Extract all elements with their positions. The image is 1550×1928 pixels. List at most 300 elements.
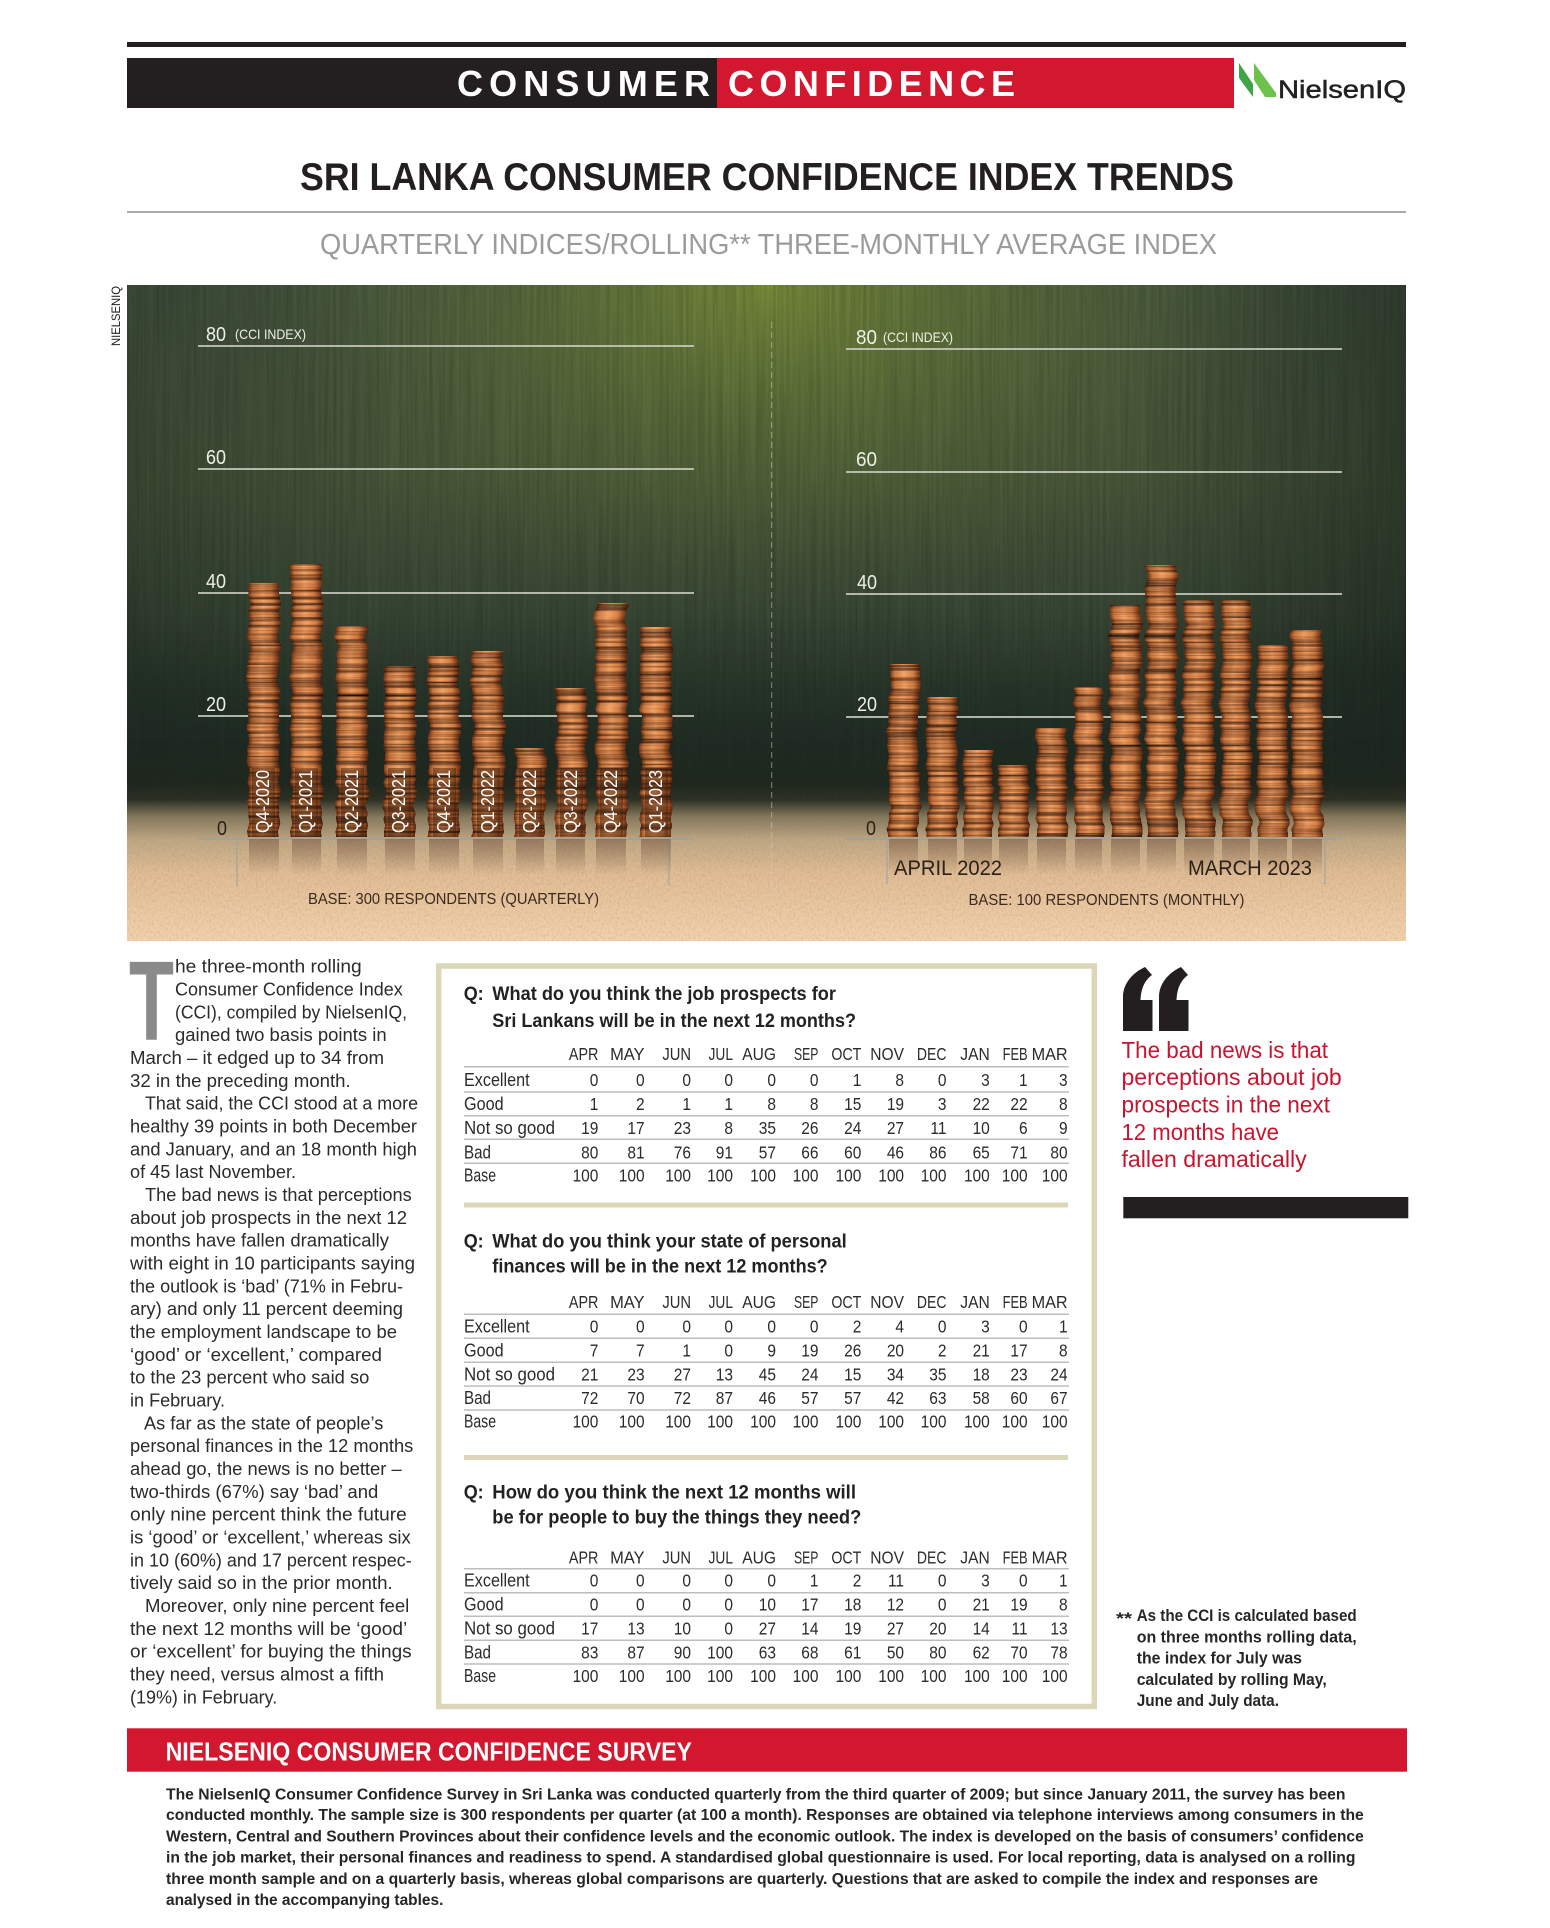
table 2: personal finances: 46 <box>759 1388 776 1408</box>
text block: article: the outlook is ‘bad’ (71% in Febru- <box>130 1275 403 1296</box>
table 2: personal finances: JUN <box>662 1292 691 1312</box>
text block: article: March – it edged up to 34 from <box>130 1047 384 1068</box>
table 3: buying things: JUN <box>662 1547 691 1568</box>
text block: article <box>129 938 418 1707</box>
table 3: buying things: FEB <box>1003 1547 1028 1568</box>
table 1: job prospects: 76 <box>674 1142 691 1163</box>
table 3: buying things: 8 <box>1059 1595 1068 1615</box>
table 3: buying things: OCT <box>831 1547 861 1568</box>
table 3: buying things: 100 <box>573 1666 598 1686</box>
table 2: personal finances: 57 <box>844 1388 861 1408</box>
table 3: buying things: 0 <box>636 1571 645 1591</box>
table 1: job prospects: 0 <box>682 1070 691 1090</box>
text block: article: gained two basis points in <box>175 1024 387 1045</box>
table 2: personal finances: 100 <box>750 1412 776 1432</box>
survey heading band <box>127 1728 1407 1772</box>
bar labels: quarters: Q2-2021 <box>342 770 362 833</box>
table 3: buying things: 0 <box>682 1595 691 1615</box>
table 1: job prospects: 100 <box>1002 1166 1028 1186</box>
table 1: job prospects: 0 <box>810 1070 818 1090</box>
chart: monthly gridlines and axis: 0 <box>866 818 876 840</box>
table 3: buying things: Not so good <box>464 1619 555 1639</box>
table 2: personal finances: 26 <box>844 1341 861 1361</box>
callout: pull quote <box>1122 1037 1342 1172</box>
callout: pull quote: prospects in the next <box>1122 1092 1331 1118</box>
text block: survey description: conducted monthly. The sample size is 300 respondents per quarter (at 100 a month). Responses are obtained via telephone interviews among consumers in the <box>166 1807 1364 1824</box>
text block: article: in February. <box>130 1390 225 1410</box>
question 2: Q: <box>464 1231 484 1253</box>
table 3: buying things: 87 <box>627 1643 645 1663</box>
bar labels: quarters: Q3-2021 <box>389 770 409 833</box>
table 1: job prospects: 100 <box>750 1166 776 1186</box>
table 3: buying things: 0 <box>1019 1571 1028 1591</box>
table 2: personal finances: 100 <box>573 1412 598 1432</box>
table 3: buying things: 19 <box>844 1619 861 1639</box>
table 2: personal finances: 9 <box>767 1341 776 1361</box>
table 2: personal finances: 34 <box>887 1364 904 1385</box>
table 3: buying things: JUL <box>709 1547 733 1568</box>
text block: article: ‘good’ or ‘excellent,’ compared <box>130 1344 382 1365</box>
table 2: personal finances: 17 <box>1010 1341 1028 1361</box>
table 2: personal finances: 18 <box>973 1364 990 1385</box>
table 2: personal finances: 87 <box>716 1388 733 1408</box>
table 2: personal finances: 58 <box>973 1388 990 1408</box>
text block: article: of 45 last November. <box>130 1161 296 1182</box>
text block: article: or ‘excellent’ for buying the things <box>130 1641 412 1662</box>
table 2: personal finances <box>464 1292 1069 1432</box>
text block: article: personal finances in the 12 months <box>130 1435 413 1456</box>
table 1: job prospects: NOV <box>870 1044 905 1064</box>
bar labels: quarters: Q1-2021 <box>296 770 316 833</box>
table 1: job prospects: 71 <box>1010 1142 1028 1163</box>
table 1: job prospects: 3 <box>1059 1070 1068 1090</box>
table 2: personal finances: 0 <box>1019 1316 1028 1337</box>
table 1: job prospects: 27 <box>887 1118 904 1138</box>
table 1: job prospects: MAR <box>1032 1044 1068 1064</box>
table 2: personal finances: Bad <box>464 1388 491 1408</box>
header rule <box>127 42 1406 47</box>
table 1: job prospects: 100 <box>964 1166 990 1186</box>
text block: survey description: analysed in the accompanying tables. <box>166 1892 443 1909</box>
table 1: job prospects: JUL <box>709 1044 733 1064</box>
bar labels: quarters: Q1-2022 <box>478 770 498 833</box>
question 1: Sri Lankans will be in the next 12 months? <box>492 1010 856 1032</box>
table 2: personal finances: 23 <box>627 1364 645 1385</box>
question 3: be for people to buy the things they need? <box>492 1506 861 1528</box>
table 1: job prospects: FEB <box>1003 1044 1028 1064</box>
text block: survey description: in the job market, their personal finances and readiness to spend. A standardised global questionnaire is used. For local reporting, data is analysed on a rolling <box>166 1850 1356 1867</box>
table 1: job prospects: 0 <box>724 1070 733 1090</box>
table 2: personal finances: 21 <box>581 1364 598 1385</box>
footnote: on three months rolling data, <box>1137 1628 1357 1646</box>
table 1: job prospects: Bad <box>464 1142 491 1162</box>
table 3: buying things: 18 <box>844 1595 861 1615</box>
callout: pull quote: perceptions about job <box>1122 1064 1342 1090</box>
table 3: buying things: 50 <box>887 1643 904 1663</box>
footnote <box>1116 1607 1357 1710</box>
table 2: personal finances: JUL <box>709 1292 733 1312</box>
table 3: buying things: 10 <box>674 1619 691 1639</box>
bar labels: quarters: Q4-2022 <box>601 770 621 833</box>
table 3: buying things: 63 <box>759 1643 776 1663</box>
table 2: personal finances: MAY <box>610 1292 645 1312</box>
table 1: job prospects: 100 <box>573 1166 598 1186</box>
table 3: buying things: 0 <box>724 1619 733 1639</box>
callout: pull quote: The bad news is that <box>1122 1037 1329 1063</box>
table 2: personal finances: 0 <box>810 1316 818 1337</box>
table 3: buying things: 100 <box>1042 1666 1068 1686</box>
text block: article: healthy 39 points in both December <box>130 1116 417 1136</box>
table 2: personal finances: 0 <box>590 1316 598 1337</box>
text block: article: That said, the CCI stood at a more <box>145 1093 418 1114</box>
table 2: personal finances: 21 <box>973 1341 990 1361</box>
table 3: buying things: 20 <box>929 1619 946 1639</box>
table 2: personal finances: 60 <box>1010 1388 1028 1408</box>
table 1: job prospects: 10 <box>973 1118 990 1138</box>
question 1: What do you think the job prospects for <box>492 983 836 1005</box>
text block: article: months have fallen dramatically <box>130 1230 390 1251</box>
bar chart: quarterly coin stacks <box>248 564 672 837</box>
text block: article: about job prospects in the next 12 <box>130 1207 407 1228</box>
table 1: job prospects: 46 <box>887 1142 904 1163</box>
table 1: job prospects: 100 <box>665 1166 691 1186</box>
table 2: personal finances: OCT <box>831 1292 861 1312</box>
table 1: job prospects: Excellent <box>464 1070 530 1090</box>
table 2: personal finances: 72 <box>674 1388 691 1408</box>
icon: quotation marks <box>1123 967 1188 1031</box>
table 2: personal finances: 100 <box>1042 1412 1068 1432</box>
table 3: buying things: JAN <box>960 1547 990 1568</box>
table 2: personal finances: 0 <box>724 1316 733 1337</box>
text block: article: (19%) in February. <box>130 1686 277 1707</box>
table 3: buying things: SEP <box>794 1547 818 1568</box>
drop cap: T <box>129 938 174 1064</box>
table 1: job prospects: 80 <box>581 1142 598 1163</box>
table 3: buying things: Bad <box>464 1643 491 1663</box>
axis labels: months <box>894 857 1312 880</box>
table 1: job prospects: 8 <box>724 1118 733 1138</box>
table 3: buying things: DEC <box>917 1547 946 1568</box>
table 3: buying things: 0 <box>938 1571 946 1591</box>
table 3: buying things: 10 <box>759 1595 776 1615</box>
text block: survey description: The NielsenIQ Consumer Confidence Survey in Sri Lanka was conducted quarterly from the third quarter of 2009; but since January 2011, the survey has been <box>166 1786 1346 1803</box>
table 3: buying things: 83 <box>581 1643 598 1663</box>
table 3: buying things: 100 <box>964 1666 990 1686</box>
question 3: Q: <box>464 1481 484 1503</box>
table 2: personal finances: 100 <box>878 1412 904 1432</box>
table 2: personal finances: 1 <box>1059 1316 1068 1337</box>
table 2: personal finances: 7 <box>636 1341 645 1361</box>
table 2: personal finances: SEP <box>794 1292 818 1312</box>
table 3: buying things: 1 <box>810 1571 818 1591</box>
table 1: job prospects: 0 <box>636 1070 645 1090</box>
table 3: buying things: 0 <box>767 1571 776 1591</box>
bar labels: quarters: Q2-2022 <box>520 770 540 833</box>
title rule <box>127 211 1406 213</box>
table 3: buying things: 0 <box>724 1571 733 1591</box>
table 1: job prospects: 1 <box>724 1094 733 1114</box>
table 1: job prospects: 19 <box>887 1094 904 1114</box>
text block: survey description: Western, Central and Southern Provinces about their confidence levels and the economic outlook. The index is developed on the basis of consumers’ confidence <box>166 1829 1364 1846</box>
table 2: personal finances: 100 <box>793 1412 818 1432</box>
panel: coin-stack charts <box>127 285 1406 941</box>
table 3: buying things: 21 <box>973 1595 990 1615</box>
table 2: personal finances: APR <box>569 1292 598 1312</box>
table 2: personal finances: 2 <box>938 1341 946 1361</box>
table 1: job prospects: 81 <box>627 1142 645 1163</box>
text block: article: Moreover, only nine percent feel <box>145 1595 409 1616</box>
table 1: job prospects: 8 <box>895 1070 904 1090</box>
text block: article: he three-month rolling <box>175 956 362 977</box>
bar labels: quarters <box>252 768 668 837</box>
chart: monthly gridlines and axis: 20 <box>857 694 877 716</box>
table 3: buying things: 90 <box>674 1643 691 1663</box>
table 3: buying things: 17 <box>581 1619 598 1639</box>
table 1: job prospects: 0 <box>767 1070 776 1090</box>
table 1: job prospects: 80 <box>1050 1142 1068 1163</box>
table 1: job prospects: 91 <box>716 1142 733 1163</box>
bar labels: quarters: Q3-2022 <box>561 770 581 833</box>
text block: article: they need, versus almost a fifth <box>130 1663 384 1684</box>
table 2: personal finances: 15 <box>844 1364 861 1385</box>
table 2: personal finances: 2 <box>853 1316 861 1337</box>
table 2: personal finances: 57 <box>801 1388 818 1408</box>
bar labels: quarters: Q4-2020 <box>253 770 273 833</box>
question 1 <box>464 983 856 1032</box>
table 1: job prospects: DEC <box>917 1044 946 1064</box>
table 2: personal finances: 100 <box>836 1412 861 1432</box>
chart: monthly gridlines and axis <box>846 327 1342 884</box>
table 1: job prospects <box>464 1044 1069 1186</box>
callout: pull quote: 12 months have <box>1122 1119 1279 1145</box>
table 3: buying things: Base <box>464 1666 496 1686</box>
chart: quarterly gridlines and axis: 20 <box>206 694 226 716</box>
table 3: buying things: 68 <box>801 1643 818 1663</box>
text block: article: two-thirds (67%) say ‘bad’ and <box>130 1481 378 1502</box>
table 1: job prospects: 22 <box>973 1094 990 1114</box>
table 3: buying things: 11 <box>1012 1619 1028 1639</box>
footnote: calculated by rolling May, <box>1137 1671 1327 1689</box>
table 2: personal finances: 0 <box>682 1316 691 1337</box>
table 1: job prospects: 19 <box>581 1118 598 1138</box>
text block: article: only nine percent think the future <box>130 1504 407 1525</box>
table 2: personal finances: 0 <box>724 1341 733 1361</box>
text block: article: tively said so in the prior month. <box>130 1572 393 1593</box>
table 1: job prospects: 26 <box>801 1118 818 1138</box>
text block: article: ahead go, the news is no better – <box>130 1458 402 1479</box>
table 1: job prospects: 8 <box>767 1094 776 1114</box>
axis labels: months: MARCH 2023 <box>1188 857 1312 880</box>
coin stack reflections <box>249 839 1322 875</box>
table 3: buying things: MAY <box>610 1547 645 1568</box>
table 1: job prospects: Good <box>464 1094 504 1114</box>
table 2: personal finances: 100 <box>665 1412 691 1432</box>
table 1: job prospects: 35 <box>759 1118 776 1138</box>
table 3: buying things: 1 <box>1059 1571 1068 1591</box>
table 1: job prospects: 11 <box>930 1118 946 1138</box>
table 3: buying things: 0 <box>938 1595 946 1615</box>
footnote: June and July data. <box>1137 1692 1279 1710</box>
table 1: job prospects: 66 <box>801 1142 818 1163</box>
table 1: job prospects: 100 <box>619 1166 645 1186</box>
callout closing bar <box>1123 1197 1408 1218</box>
table 2: personal finances: 0 <box>938 1316 946 1337</box>
table 2: personal finances: Base <box>464 1412 496 1432</box>
chart: quarterly gridlines and axis: 80 <box>206 324 226 346</box>
table 3: buying things: 61 <box>844 1643 861 1663</box>
table 1: job prospects: 57 <box>759 1142 776 1163</box>
table 2: personal finances: 100 <box>964 1412 990 1432</box>
text block: survey description: three month sample and on a quarterly basis, whereas global comparisons are quarterly. Questions that are asked to compile the index and responses are <box>166 1871 1318 1888</box>
chart: quarterly gridlines and axis: (CCI INDEX) <box>235 326 306 342</box>
footnote: the index for July was <box>1137 1649 1302 1667</box>
table 3: buying things: AUG <box>742 1547 776 1568</box>
text block: article: (CCI), compiled by NielsenIQ, <box>175 1001 407 1022</box>
table 3: buying things: 100 <box>665 1666 691 1686</box>
chart: quarterly gridlines and axis <box>198 324 694 886</box>
table 3: buying things: 100 <box>619 1666 645 1686</box>
table 3: buying things: 100 <box>921 1666 946 1686</box>
table 3: buying things: NOV <box>870 1547 905 1568</box>
table 3: buying things: 0 <box>724 1595 733 1615</box>
table 1: job prospects: SEP <box>794 1044 818 1064</box>
table 2: personal finances: 72 <box>581 1388 598 1408</box>
table 3: buying things: 70 <box>1010 1643 1028 1663</box>
table 2: personal finances: 20 <box>887 1341 904 1361</box>
table 2: personal finances: 100 <box>619 1412 645 1432</box>
table 2: personal finances: 8 <box>1059 1341 1068 1361</box>
table 3: buying things: 100 <box>707 1666 733 1686</box>
table 1: job prospects: 15 <box>844 1094 861 1114</box>
question 3 <box>464 1481 861 1528</box>
table 1: job prospects: 100 <box>707 1166 733 1186</box>
table 3: buying things: 100 <box>878 1666 904 1686</box>
table 2: personal finances: Good <box>464 1341 504 1361</box>
question 3: How do you think the next 12 months will <box>492 1481 856 1503</box>
text block: article: As far as the state of people’s <box>144 1412 383 1433</box>
table 1: job prospects: 60 <box>844 1142 861 1163</box>
table 3: buying things: 13 <box>1050 1619 1068 1639</box>
chart: monthly gridlines and axis: 40 <box>857 572 877 594</box>
table 1: job prospects: 2 <box>636 1094 645 1114</box>
table 3: buying things: 27 <box>759 1619 776 1639</box>
table 1: job prospects: OCT <box>831 1044 861 1064</box>
bar labels: quarters: Q1-2023 <box>646 770 666 833</box>
table 2: personal finances: 100 <box>1002 1412 1028 1432</box>
table 2: personal finances: DEC <box>917 1292 946 1312</box>
table 2: personal finances: 67 <box>1050 1388 1068 1408</box>
table 1: job prospects: 1 <box>590 1094 598 1114</box>
text block: article: is ‘good’ or ‘excellent,’ whereas six <box>130 1526 411 1548</box>
text block: article: to the 23 percent who said so <box>130 1367 369 1388</box>
question 2: finances will be in the next 12 months? <box>492 1256 828 1278</box>
table 2: personal finances: JAN <box>960 1292 990 1312</box>
question 1: Q: <box>464 983 484 1005</box>
table 1: job prospects: 100 <box>878 1166 904 1186</box>
table 3: buying things: 0 <box>636 1595 645 1615</box>
logo: NielsenIQ <box>1239 63 1406 104</box>
chart: quarterly gridlines and axis: 0 <box>217 818 227 840</box>
table 2: personal finances: MAR <box>1032 1292 1068 1312</box>
table 3: buying things: 80 <box>929 1643 946 1663</box>
table 3: buying things: 17 <box>801 1595 818 1615</box>
subtitle: QUARTERLY INDICES/ROLLING** THREE-MONTHLY AVERAGE INDEX <box>320 229 1217 261</box>
table 3: buying things: 13 <box>627 1619 645 1639</box>
table 3: buying things: MAR <box>1032 1547 1068 1568</box>
table 2: personal finances: 3 <box>981 1316 990 1337</box>
table 3: buying things: 100 <box>836 1666 861 1686</box>
question 2: What do you think your state of personal <box>492 1231 847 1253</box>
footnote: As the CCI is calculated based <box>1137 1607 1357 1625</box>
text block: article: in 10 (60%) and 17 percent respec- <box>130 1549 412 1570</box>
table 2: personal finances: 27 <box>674 1364 691 1385</box>
table 1: job prospects: 1 <box>682 1094 691 1114</box>
banner: consumer confidence: CONSUMER <box>457 63 710 104</box>
banner: consumer confidence: CONFIDENCE <box>728 63 1015 104</box>
table 3: buying things: 14 <box>973 1619 990 1639</box>
table 2: personal finances: 0 <box>636 1316 645 1337</box>
text block: article: and January, and an 18 month high <box>130 1138 417 1159</box>
panel: survey tables <box>439 966 1094 1706</box>
table 1: job prospects: Not so good <box>464 1118 555 1138</box>
table 3: buying things: 19 <box>1010 1595 1028 1615</box>
table 3: buying things: 100 <box>707 1643 733 1663</box>
table 3: buying things: 100 <box>750 1666 776 1686</box>
table 1: job prospects: 100 <box>921 1166 946 1186</box>
chart: quarterly gridlines and axis: 40 <box>206 571 226 593</box>
table 1: job prospects: 86 <box>929 1142 946 1163</box>
table 3: buying things: 3 <box>981 1571 990 1591</box>
table 2: personal finances: Excellent <box>464 1316 530 1336</box>
title: SRI LANKA CONSUMER CONFIDENCE INDEX TRENDS <box>300 156 1234 199</box>
table 2: personal finances: 70 <box>627 1388 645 1408</box>
table 1: job prospects: 3 <box>981 1070 990 1090</box>
table 1: job prospects: 8 <box>1059 1094 1068 1114</box>
table 2: personal finances: Not so good <box>464 1364 555 1384</box>
table 1: job prospects: 100 <box>1042 1166 1068 1186</box>
table 3: buying things: 78 <box>1050 1643 1068 1663</box>
table 3: buying things: 0 <box>590 1571 598 1591</box>
table 2: personal finances: 35 <box>929 1364 946 1385</box>
table 3: buying things: 11 <box>888 1571 904 1591</box>
bar chart: monthly coin stacks <box>889 565 1322 837</box>
text block: article: 32 in the preceding month. <box>130 1070 351 1091</box>
table 2: personal finances: 100 <box>921 1412 946 1432</box>
table 2: personal finances: 23 <box>1010 1364 1028 1385</box>
callout: pull quote: fallen dramatically <box>1122 1146 1307 1172</box>
base note: quarterly: BASE: 300 RESPONDENTS (QUARTERLY) <box>308 891 599 908</box>
text block: article: ary) and only 11 percent deeming <box>130 1298 403 1319</box>
table 1: job prospects: 8 <box>810 1094 818 1114</box>
table 1: job prospects: 22 <box>1010 1094 1028 1114</box>
table 1: job prospects: APR <box>569 1044 598 1064</box>
bar labels: quarters: Q4-2021 <box>434 770 454 833</box>
table 2: personal finances: AUG <box>742 1292 776 1312</box>
base note: monthly: BASE: 100 RESPONDENTS (MONTHLY) <box>968 892 1244 909</box>
table 2: personal finances: NOV <box>870 1292 905 1312</box>
table 2: personal finances: 1 <box>682 1341 691 1361</box>
table 3: buying things: 100 <box>793 1666 818 1686</box>
text block: article: with eight in 10 participants saying <box>129 1252 415 1274</box>
table 3: buying things: 0 <box>682 1571 691 1591</box>
table 2: personal finances: 42 <box>887 1388 904 1408</box>
table 1: job prospects: 24 <box>844 1118 861 1138</box>
table 1: job prospects: MAY <box>610 1044 645 1064</box>
side credit: NIELSENIQ <box>109 286 123 346</box>
table 1: job prospects: 3 <box>938 1094 946 1114</box>
table 1: job prospects: 1 <box>1019 1070 1028 1090</box>
table 3: buying things: 12 <box>887 1595 904 1615</box>
